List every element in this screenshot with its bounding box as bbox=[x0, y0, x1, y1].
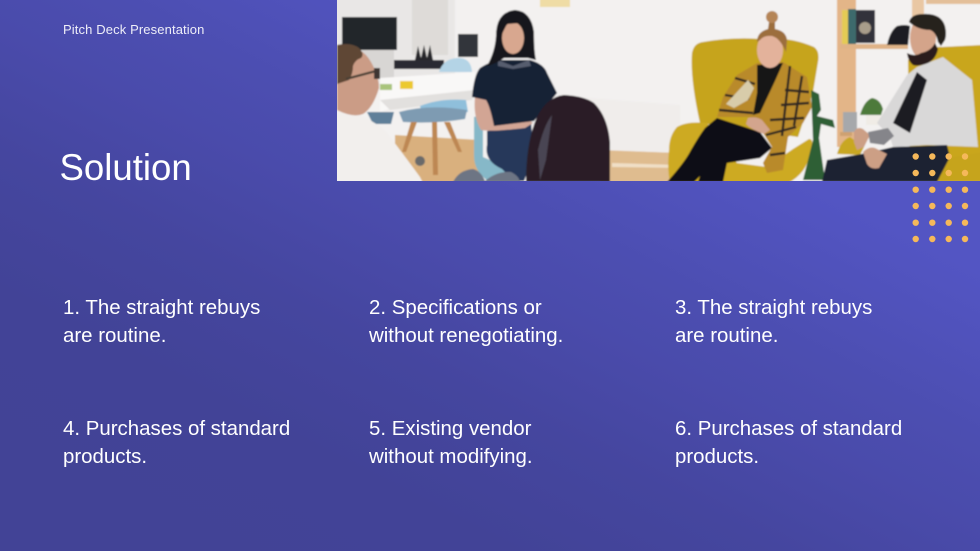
solution item 6 bbox=[675, 416, 902, 468]
plaid jacket bbox=[717, 62, 812, 173]
solution item 5: without modifying. bbox=[369, 444, 533, 468]
solution item 1 bbox=[63, 296, 260, 346]
sticky notes bbox=[540, 0, 570, 7]
white table bbox=[380, 72, 475, 112]
solution item 2: 2. Specifications or bbox=[369, 296, 542, 318]
solution item 5 bbox=[369, 416, 533, 468]
solution item 3: are routine. bbox=[675, 324, 778, 346]
black trousers bbox=[667, 118, 772, 182]
eyebrow label: Pitch Deck Presentation bbox=[63, 22, 204, 37]
dot grid decoration bbox=[912, 153, 968, 242]
solution item 4: products. bbox=[63, 444, 147, 468]
solution item 3: 3. The straight rebuys bbox=[675, 296, 872, 318]
solution item 6: products. bbox=[675, 444, 759, 468]
gray cushions at bottom bbox=[453, 169, 520, 182]
solution item 5: 5. Existing vendor bbox=[369, 416, 531, 440]
stool bbox=[420, 100, 468, 114]
photo: team meeting bbox=[337, 0, 980, 181]
solution item 1: are routine. bbox=[63, 324, 166, 346]
monitor, laptop, router, box bbox=[342, 17, 397, 50]
solution item 2 bbox=[369, 296, 563, 346]
title: Solution bbox=[60, 147, 192, 188]
solution item 4: 4. Purchases of standard bbox=[63, 416, 290, 440]
shelf and books bbox=[837, 0, 856, 147]
solution item 3 bbox=[675, 296, 872, 346]
blue chair back bbox=[439, 58, 472, 72]
yellow chair and woman bbox=[692, 38, 818, 137]
man with glasses bbox=[337, 105, 423, 183]
solution item 6: 6. Purchases of standard bbox=[675, 416, 902, 440]
solution item 4 bbox=[63, 416, 290, 468]
solution item 2: without renegotiating. bbox=[369, 324, 563, 346]
plant bbox=[803, 90, 835, 180]
wall and floor bbox=[330, 0, 980, 190]
yellow chair and bearded man bbox=[908, 45, 980, 165]
solution item 1: 1. The straight rebuys bbox=[63, 296, 260, 318]
foreground long hair bbox=[526, 95, 610, 182]
blue chair under woman bbox=[474, 115, 515, 181]
woman in navy bbox=[487, 123, 534, 181]
